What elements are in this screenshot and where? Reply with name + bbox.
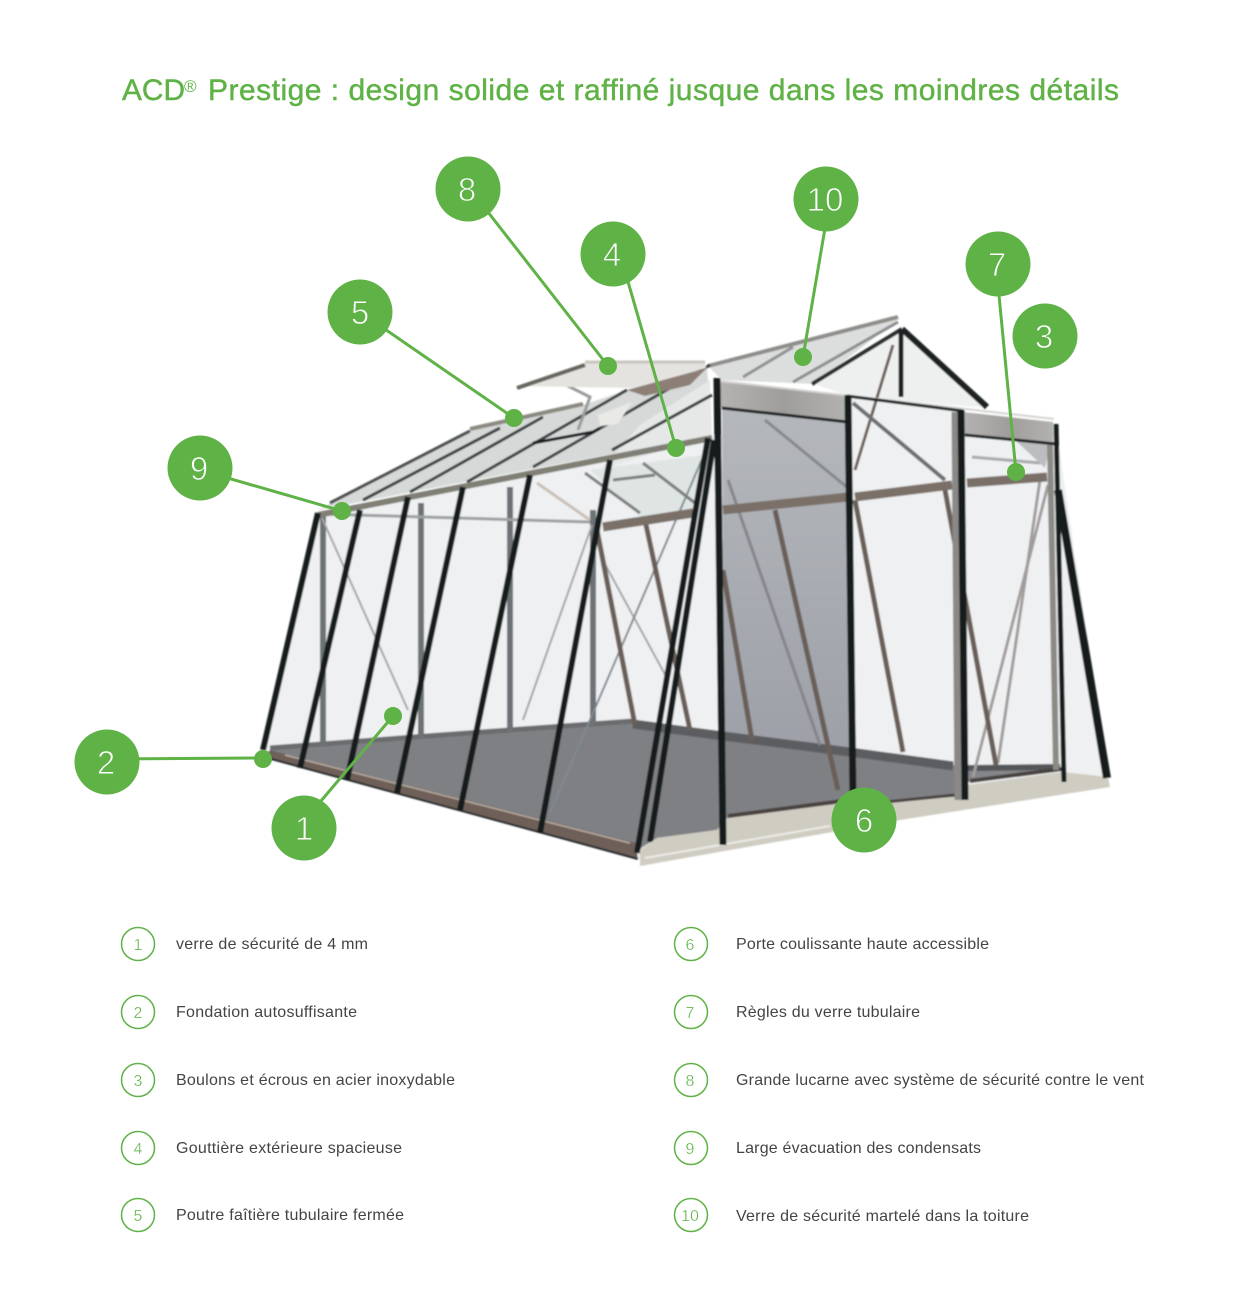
callout leader lines <box>107 189 1016 828</box>
legend item 4: Gouttière extérieure spacieuse <box>176 1140 402 1157</box>
right roof <box>708 318 900 384</box>
front header bars <box>720 382 847 420</box>
roof vent opening <box>627 368 707 396</box>
legend item 6: 6 <box>686 937 695 954</box>
callout 10 <box>794 166 858 232</box>
title: ACD <box>122 74 185 107</box>
callout 10: 10 <box>807 181 843 218</box>
skylight <box>517 362 706 388</box>
legend item 1 <box>122 928 368 960</box>
callout 2: 2 <box>97 744 115 781</box>
legend item 3: Boulons et écrous en acier inoxydable <box>176 1072 455 1089</box>
callout dots <box>254 348 1025 768</box>
legend item 5: Poutre faîtière tubulaire fermée <box>176 1207 404 1224</box>
title: ® <box>184 77 197 96</box>
callout 9 <box>168 436 232 500</box>
callout 1 <box>272 796 336 860</box>
base sill <box>264 750 638 860</box>
callout 7: 7 <box>988 246 1006 283</box>
callout 6: 6 <box>855 802 873 839</box>
legend item 10: 10 <box>681 1208 699 1225</box>
callout 6 <box>832 788 896 852</box>
callout 3 <box>1012 304 1078 368</box>
legend item 7 <box>674 996 920 1028</box>
glass walls <box>263 425 1108 860</box>
door glass panel <box>722 408 852 820</box>
side rafters <box>263 438 714 853</box>
legend item 6: Porte coulissante haute accessible <box>736 936 989 953</box>
legend item 2: 2 <box>134 1005 143 1022</box>
callout 4 <box>580 222 646 286</box>
back posts <box>323 487 593 745</box>
legend item 3 <box>122 1064 455 1096</box>
floor <box>270 723 955 850</box>
legend item 4: 4 <box>134 1141 143 1158</box>
front posts <box>955 412 958 800</box>
callout 5 <box>328 280 392 344</box>
legend item 2 <box>122 996 357 1028</box>
front cream base <box>640 772 1110 866</box>
legend item 1: verre de sécurité de 4 mm <box>176 936 368 953</box>
legend item 10: Verre de sécurité martelé dans la toiture <box>736 1208 1029 1225</box>
legend item 9: 9 <box>686 1141 695 1158</box>
under-eave glass <box>590 455 703 517</box>
legend item 7: 7 <box>686 1005 695 1022</box>
legend item 9 <box>674 1132 981 1164</box>
horizontal beam <box>603 477 1047 527</box>
legend item 1: 1 <box>134 937 143 954</box>
legend item 8: 8 <box>686 1073 695 1090</box>
legend item 2: Fondation autosuffisante <box>176 1004 357 1021</box>
legend item 9: Large évacuation des condensats <box>736 1140 981 1157</box>
callout 2 <box>74 730 140 794</box>
greenhouse illustration <box>263 317 1110 866</box>
callout 7 <box>966 232 1030 296</box>
under-eave struts <box>585 463 695 513</box>
back wall base <box>270 721 633 748</box>
legend item 10 <box>674 1198 1029 1232</box>
callout 9: 9 <box>190 450 208 487</box>
title: Prestige : design solide et raffiné jusque dans les moindres détails <box>208 74 1119 107</box>
callout 5: 5 <box>351 294 369 331</box>
callout 4: 4 <box>603 236 621 273</box>
legend item 8: Grande lucarne avec système de sécurité contre le vent <box>736 1072 1145 1089</box>
legend item 3: 3 <box>134 1073 143 1090</box>
legend item 8 <box>674 1064 1145 1096</box>
left roof <box>318 367 712 510</box>
legend item 6 <box>674 928 989 960</box>
legend item 7: Règles du verre tubulaire <box>736 1004 920 1021</box>
callout 3: 3 <box>1035 318 1053 355</box>
legend item 5: 5 <box>134 1208 143 1225</box>
callout 8 <box>436 156 500 222</box>
gable <box>815 328 987 408</box>
brown frame struts <box>597 490 996 790</box>
legend item 4 <box>122 1132 402 1164</box>
thin bracing <box>322 457 1048 813</box>
callout 8: 8 <box>458 171 476 208</box>
callout 1: 1 <box>295 810 313 847</box>
legend item 5 <box>122 1198 404 1232</box>
upper front glass <box>850 396 963 500</box>
